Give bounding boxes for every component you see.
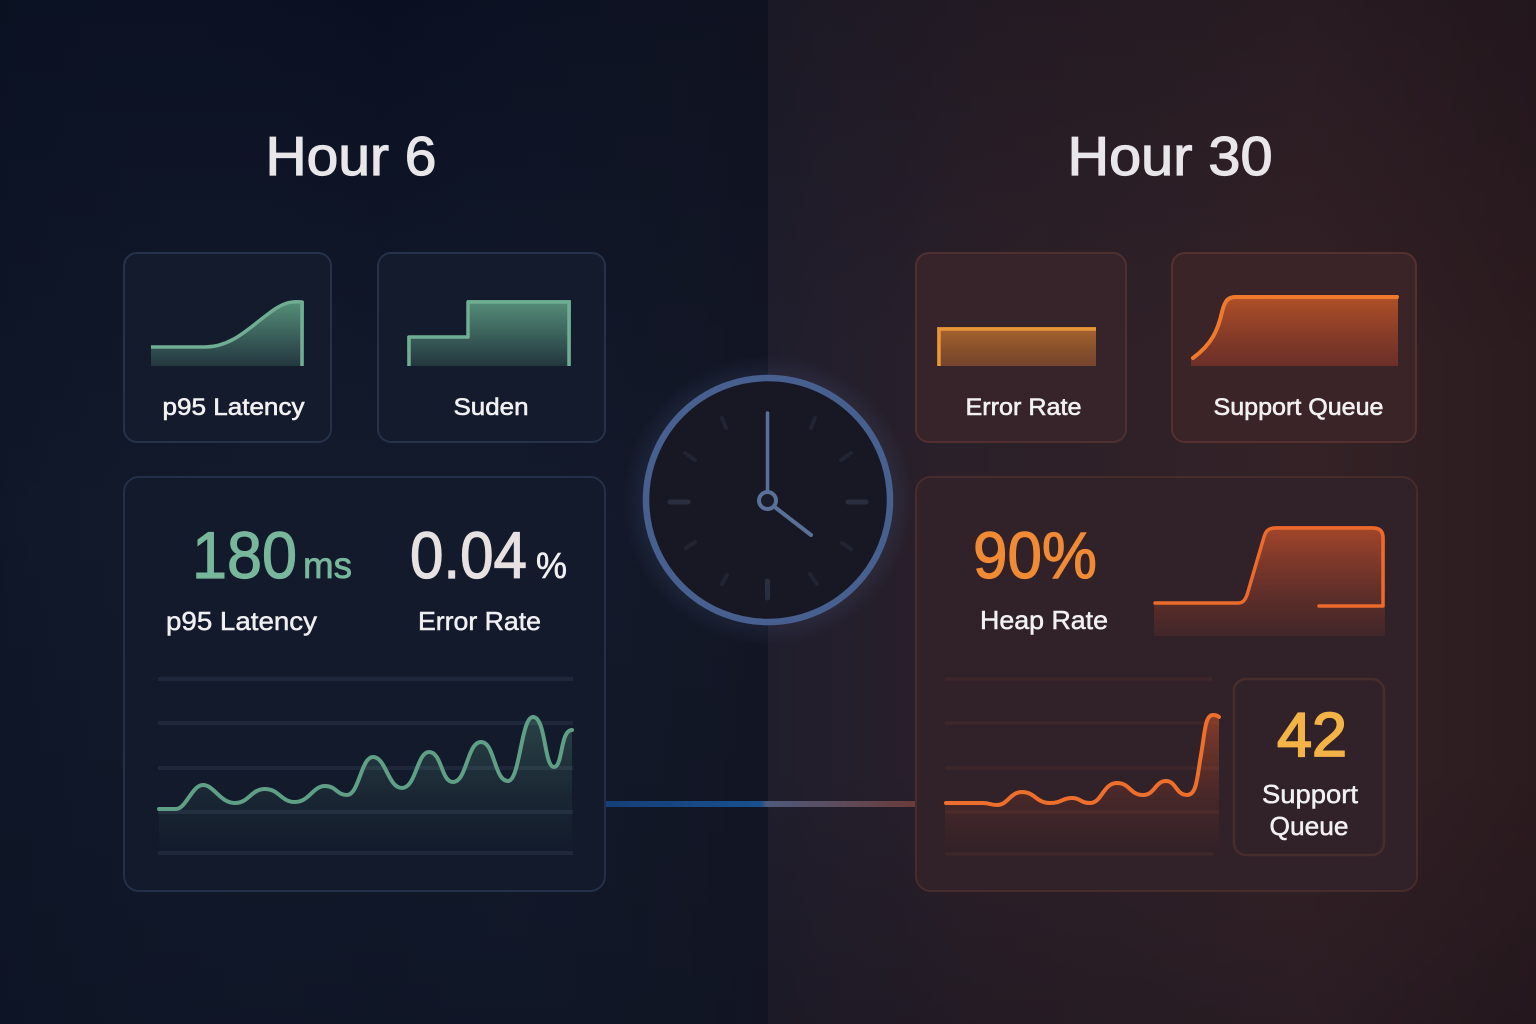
panel: Support Queue card	[1172, 253, 1416, 442]
card: Support Queue 42	[1234, 679, 1384, 855]
metric: 42: 42	[1277, 701, 1347, 770]
icon: saturating orange curve	[1191, 295, 1398, 366]
chart: support queue sparkline	[945, 679, 1219, 855]
heading: Hour 30: Hour 30	[1068, 125, 1272, 187]
background: right half	[768, 0, 1536, 1024]
label: Support Queue: Queue	[1270, 811, 1348, 841]
panel: Error Rate card	[916, 253, 1126, 442]
label: p95 Latency: p95 Latency	[162, 394, 304, 421]
metric unit: ms: ms	[303, 545, 352, 586]
icon: step curve	[407, 300, 571, 366]
panel: p95 Latency card	[124, 253, 331, 442]
metric: 0.04: 0.04	[410, 518, 527, 592]
metric unit: percent: %	[536, 545, 567, 586]
icon: flat amber bar	[937, 327, 1096, 366]
chart: heap step curve	[1154, 526, 1385, 636]
background: left half	[0, 0, 768, 1024]
metric: 180 ms: 180	[192, 518, 297, 592]
icon: p95 latency curve	[151, 301, 304, 366]
panel: Hour 6 metrics	[124, 477, 605, 891]
connector line between panels	[606, 801, 915, 807]
icon: clock	[623, 355, 913, 645]
metric: 90%: 90%	[973, 518, 1097, 592]
heading: Hour 6: Hour 6	[266, 125, 436, 187]
panel: Suden card	[378, 253, 605, 442]
label: Support Queue: Support Queue	[1214, 394, 1384, 421]
chart: p95 latency sparkline	[158, 679, 573, 855]
label: Heap Rate: Heap Rate	[980, 605, 1108, 635]
label: p95 Latency: p95 Latency	[166, 606, 317, 636]
label: Error Rate: Error Rate	[966, 394, 1082, 421]
label: Error Rate: Error Rate	[418, 606, 541, 636]
label: Suden: Suden	[454, 394, 528, 421]
label: Support Queue: Support	[1262, 779, 1359, 809]
panel: Hour 30 metrics	[916, 477, 1417, 891]
